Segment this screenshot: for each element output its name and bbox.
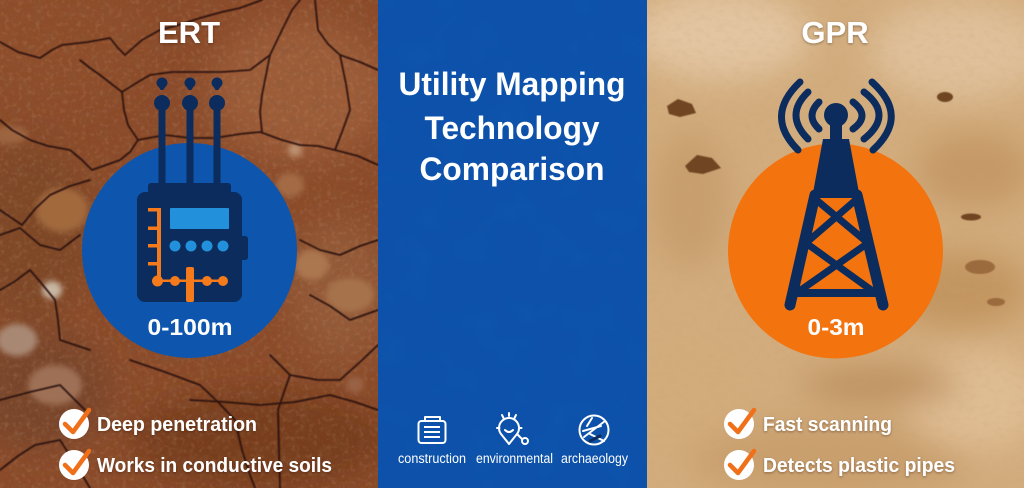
list: ERT benefits (59, 409, 332, 480)
ERT circle (82, 143, 297, 358)
icon: tower (790, 103, 883, 305)
sector: archaeology (561, 416, 628, 466)
heading: ERT: ERT (158, 15, 220, 50)
item: fast scanning: Fast scanning (763, 414, 892, 436)
label: GPR depth: 0-3m (808, 314, 864, 340)
title: Utility Mapping (398, 66, 626, 102)
item: deep penetration (59, 409, 257, 439)
soil cracks (0, 0, 378, 488)
icon: GPR depth circle with radar tower (728, 82, 943, 358)
sector: environmental (476, 413, 553, 466)
panel: ERT soil background (0, 0, 390, 488)
GPR circle (728, 144, 943, 358)
sand pebbles (667, 92, 1005, 306)
icon: orange depth scale and electrodes (148, 208, 228, 302)
sector: archaeology: archaeology (561, 451, 628, 466)
icon: construction (418, 417, 446, 443)
item: fast scanning (724, 409, 892, 439)
icon: antennas (137, 78, 248, 302)
icon: archaeology (580, 416, 608, 444)
icon: meter screen (170, 208, 229, 229)
item: detects plastic pipes: Detects plastic pipes (763, 455, 955, 477)
item: works in conductive soils: Works in conductive soils (97, 455, 332, 477)
sector: construction (398, 417, 466, 466)
heading: GPR: GPR (801, 15, 869, 50)
panel: GPR sand background (630, 0, 1024, 488)
item: deep penetration: Deep penetration (97, 414, 257, 436)
soil clods and stones (0, 126, 374, 405)
item: detects plastic pipes (724, 450, 955, 480)
icon: environmental (497, 413, 528, 444)
title: Technology (424, 110, 600, 146)
title: Comparison (420, 151, 604, 187)
panel: centre blue (378, 0, 647, 488)
icon: ERT depth circle with resistivity meter (82, 78, 297, 358)
icon: radio waves (781, 82, 891, 150)
list: GPR benefits (724, 409, 955, 480)
sector: environmental: environmental (476, 451, 553, 466)
icon: meter buttons (170, 240, 228, 252)
item: works in conductive soils (59, 450, 332, 480)
sector: construction: construction (398, 451, 466, 466)
title (398, 66, 626, 187)
label: ERT depth: 0-100m (148, 314, 232, 340)
